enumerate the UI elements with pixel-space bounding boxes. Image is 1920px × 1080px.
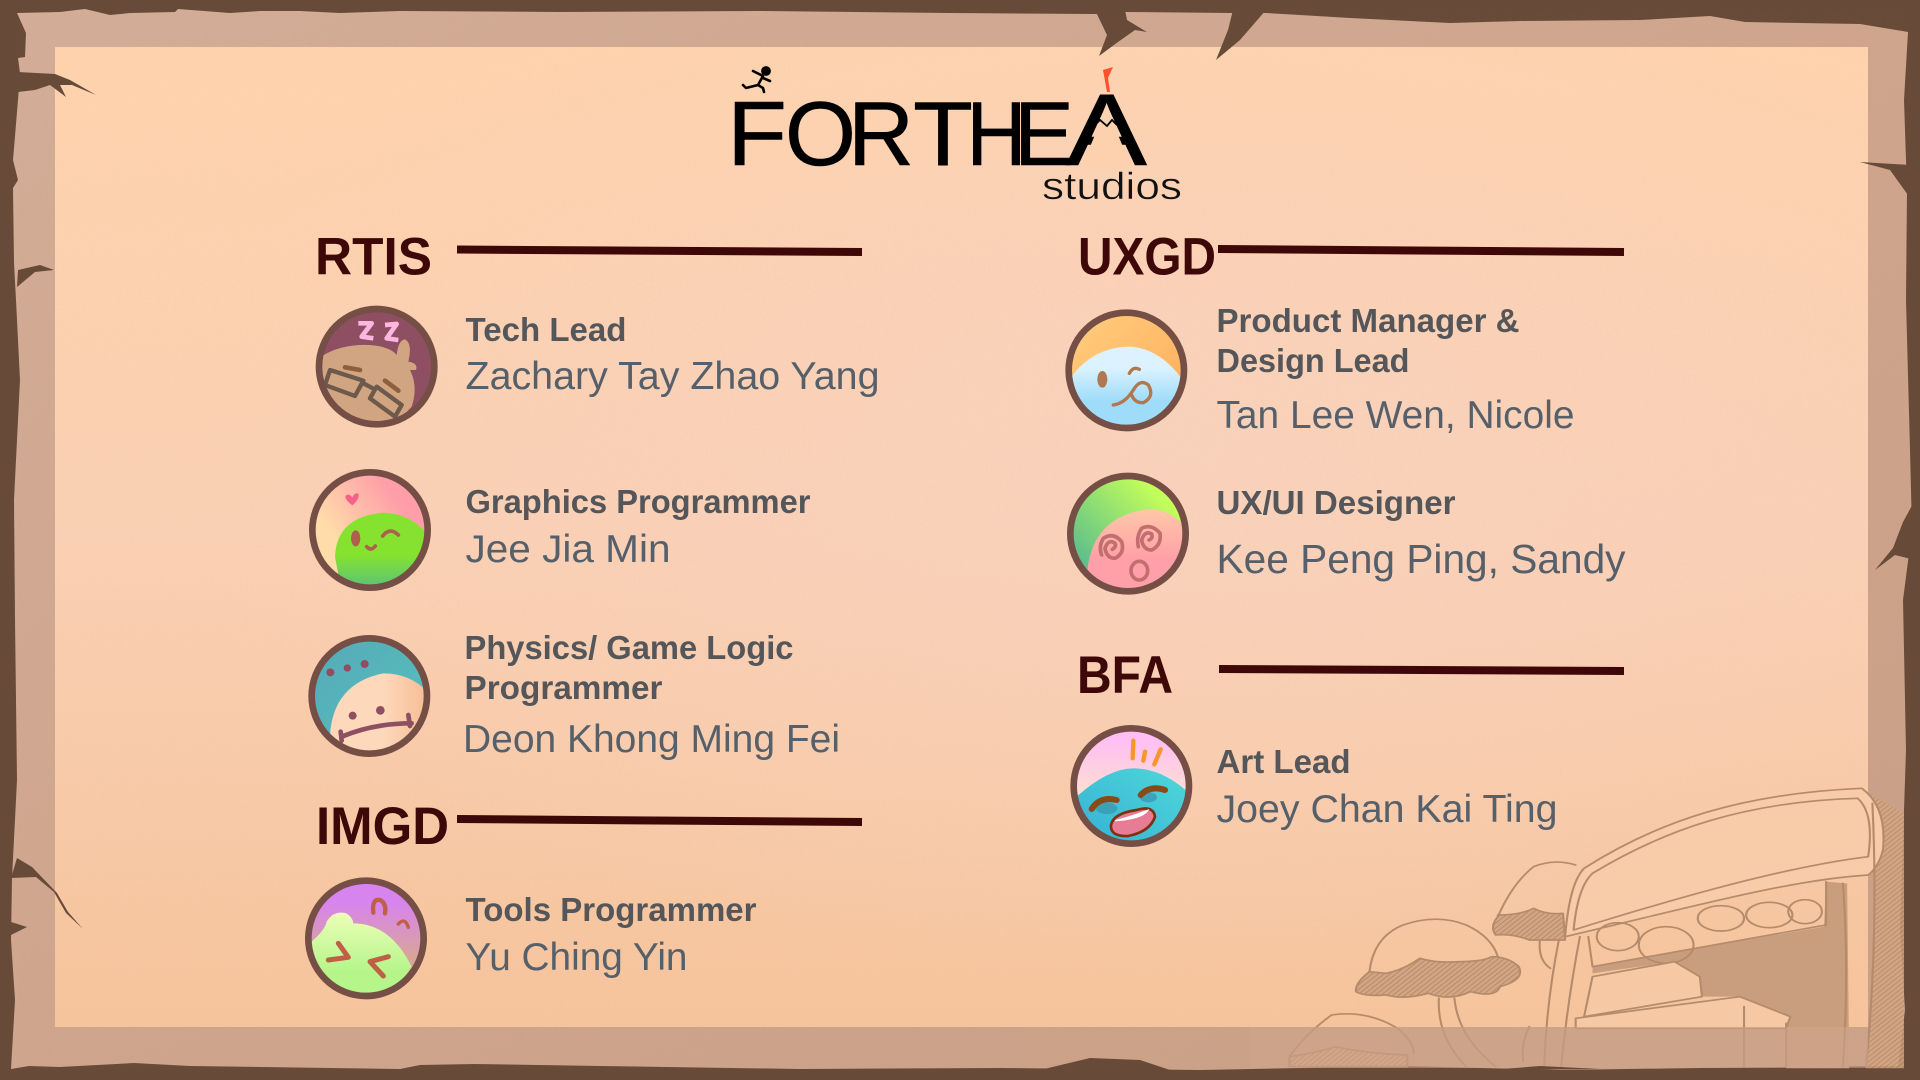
logo: Forthea Studios (727, 67, 1182, 208)
wordmark: F (727, 84, 787, 185)
role and name: Tools Programmer (466, 891, 757, 928)
wordmark: R (848, 84, 914, 185)
wordmark (727, 73, 1147, 187)
avatar: laughing cyan (1070, 725, 1190, 847)
role and name: Art Lead (1216, 743, 1350, 780)
wordmark: H (966, 84, 1026, 185)
avatar: purple squint (307, 878, 427, 998)
member: Physics / Game Logic Programmer (310, 629, 840, 761)
member: Art Lead (1070, 725, 1558, 847)
member: Product Manager and Design Lead (1067, 302, 1574, 437)
section: IMGD (316, 797, 862, 856)
icon: red flag (1103, 67, 1113, 92)
role and name: UX/UI Designer (1216, 484, 1456, 521)
role and name: Physics/ Game Logic (464, 629, 794, 666)
bottom frame band over illustration (1250, 1027, 1868, 1068)
member: Tools Programmer (307, 878, 757, 998)
member: Tools Programmer: Yu Ching Yin (466, 936, 688, 979)
member: Graphics Programmer (310, 470, 811, 590)
avatar: dizzy pink (1068, 473, 1188, 593)
studios subtitle: studios (1042, 166, 1182, 208)
member: Product Manager and Design Lead: Design Lead (1216, 342, 1410, 379)
avatar: blue tongue (1067, 310, 1187, 430)
avatar: sleepy glasses (317, 307, 437, 430)
member: Physics / Game Logic Programmer: Programmer (464, 669, 663, 706)
wordmark: O (785, 84, 856, 185)
member: Tech Lead: Zachary Tay Zhao Yang (466, 355, 880, 398)
avatar: green wink (310, 470, 430, 590)
wordmark: A (1066, 73, 1147, 187)
avatar: teal flat mouth (310, 637, 430, 757)
role and name: Graphics Programmer (466, 483, 811, 520)
member: Art Lead: Joey Chan Kai Ting (1216, 788, 1558, 831)
icon: running figure (743, 67, 770, 92)
background illustration: chest and mushrooms (1289, 788, 1906, 1068)
member: Tech Lead (317, 307, 880, 430)
heading: RTIS: RTIS (315, 228, 432, 286)
member: Graphics Programmer: Jee Jia Min (466, 528, 670, 571)
member: UX/UI Designer: Kee Peng Ping, Sandy (1216, 536, 1626, 582)
role and name: Tech Lead (466, 311, 626, 348)
section: UXGD (1078, 228, 1624, 286)
member: Physics / Game Logic Programmer: Deon Khong Ming Fei (463, 718, 840, 761)
role and name: Product Manager & (1216, 302, 1520, 339)
mountain interior of the A (1082, 118, 1131, 166)
wordmark: T (913, 84, 973, 185)
heading: UXGD: UXGD (1078, 228, 1216, 286)
member: Product Manager and Design Lead: Tan Lee Wen, Nicole (1216, 394, 1574, 437)
wordmark: E (1014, 84, 1074, 185)
heading: BFA: BFA (1077, 646, 1173, 705)
heading: IMGD: IMGD (316, 797, 449, 856)
member: UX/UI Designer (1068, 473, 1626, 593)
